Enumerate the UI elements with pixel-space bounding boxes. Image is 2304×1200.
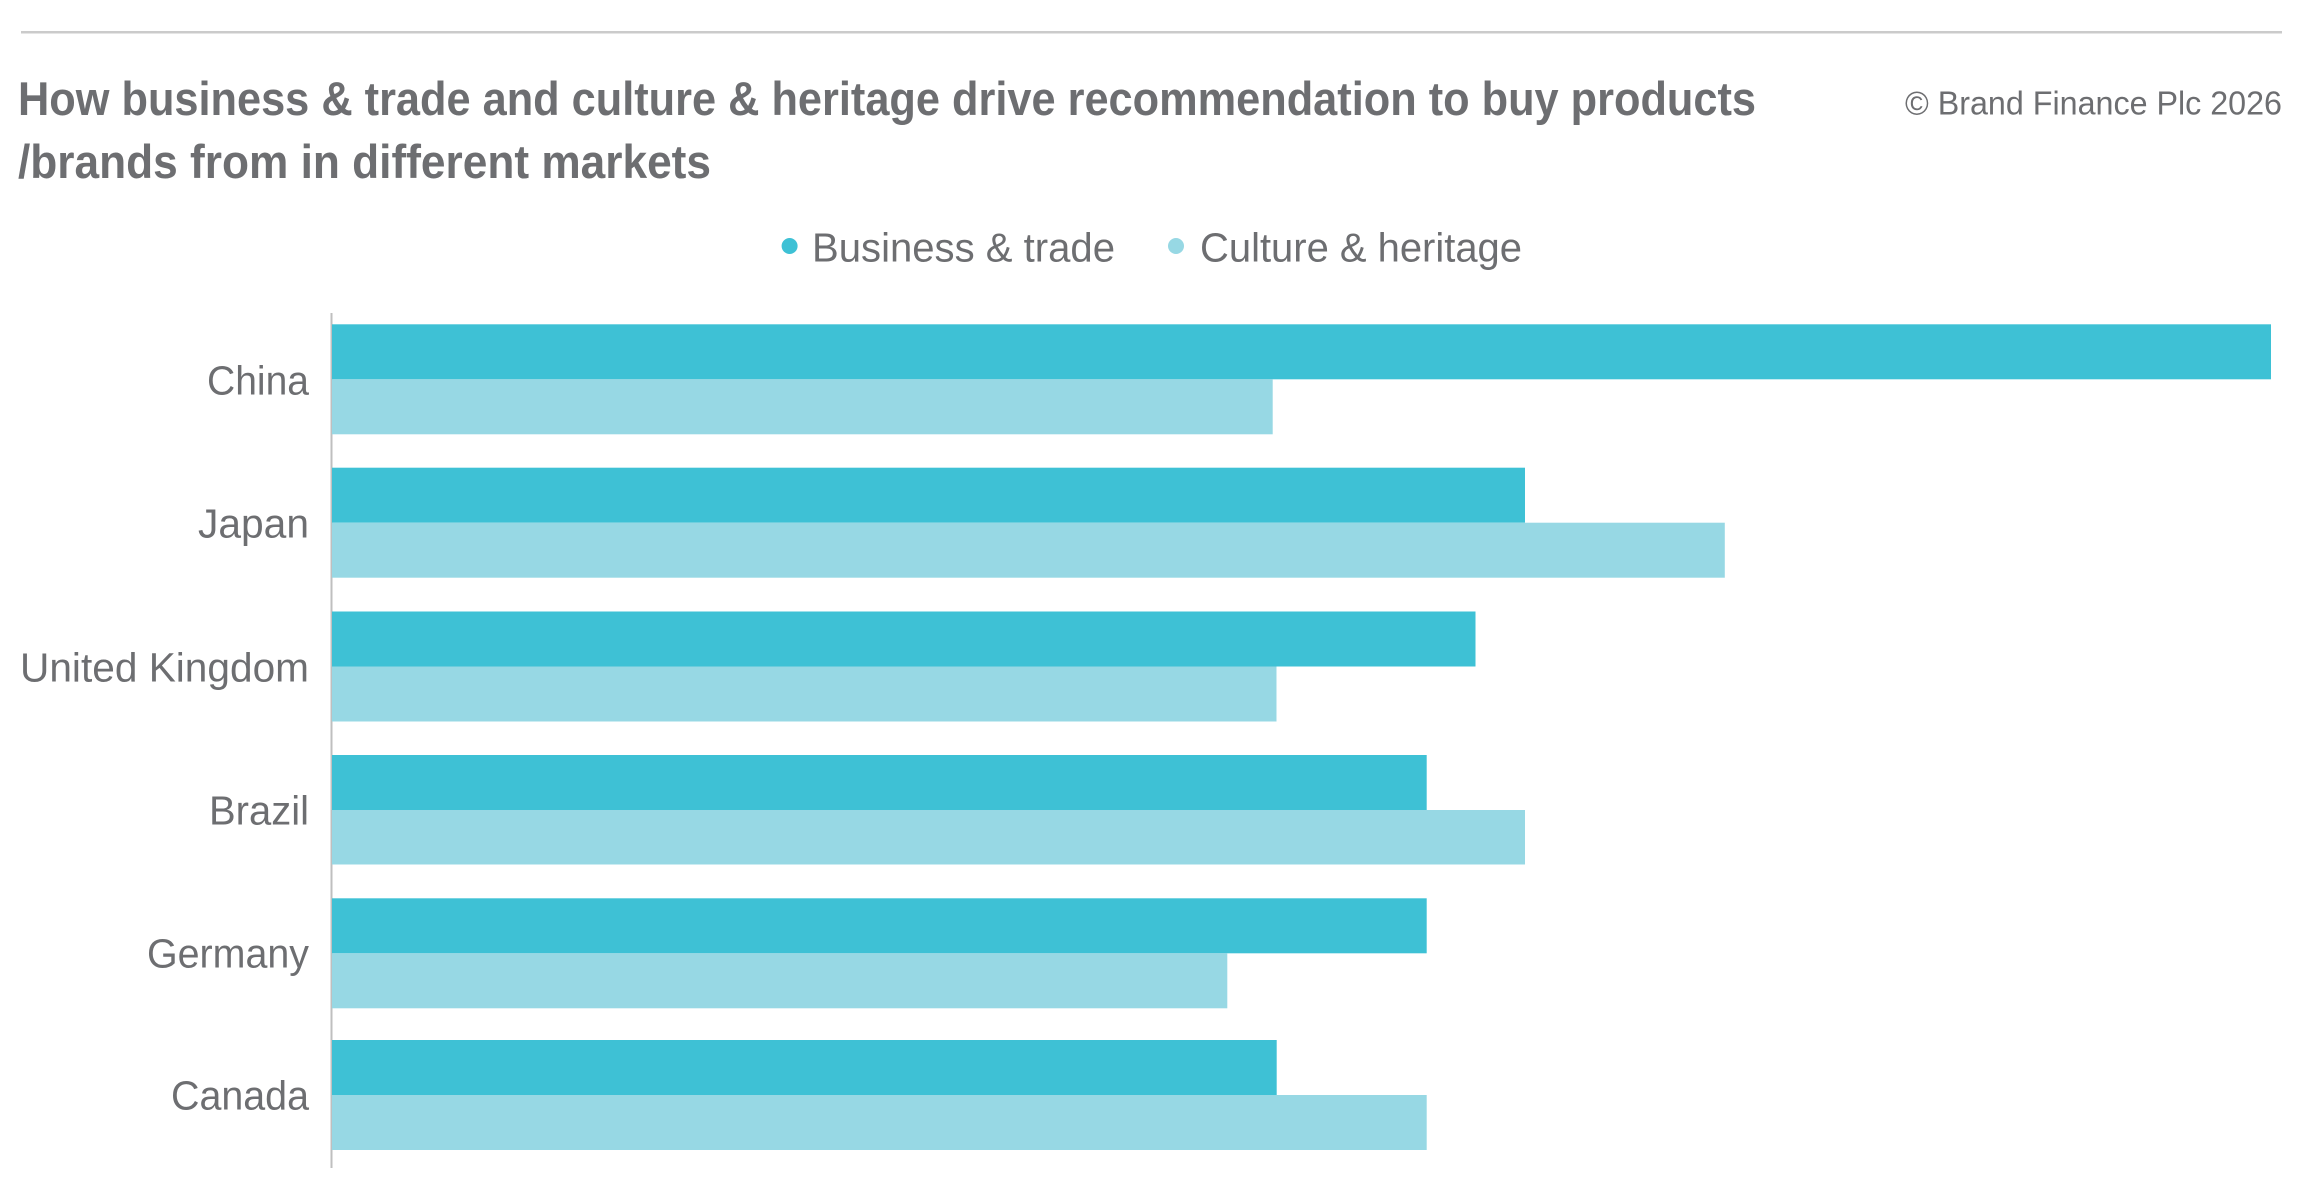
row: Germany: Germany [147,930,309,976]
title: How business & trade and culture & heritage drive recommendation to buy products [18,72,1756,125]
row: United Kingdom: United Kingdom [20,644,309,690]
row: Canada [171,1040,1427,1150]
legend item: business and trade: Business & trade [812,224,1115,270]
row: Brazil: Brazil [209,788,309,834]
row: Brazil [209,755,1525,864]
legend [782,224,1522,270]
title: /brands from in different markets [18,135,711,188]
row: China: China [207,358,309,404]
row: Canada: Canada [171,1072,309,1118]
row: United Kingdom [20,612,1476,722]
legend item: culture and heritage: Culture & heritage [1200,224,1522,270]
row: China [207,324,2271,434]
bar chart [20,313,2271,1168]
row: Japan: Japan [198,500,309,546]
row: Germany [147,898,1427,1008]
row: Japan [198,468,1725,578]
title [18,72,1756,188]
category axis [330,313,332,1168]
copyright note: © Brand Finance Plc 2026 [1905,86,2282,122]
